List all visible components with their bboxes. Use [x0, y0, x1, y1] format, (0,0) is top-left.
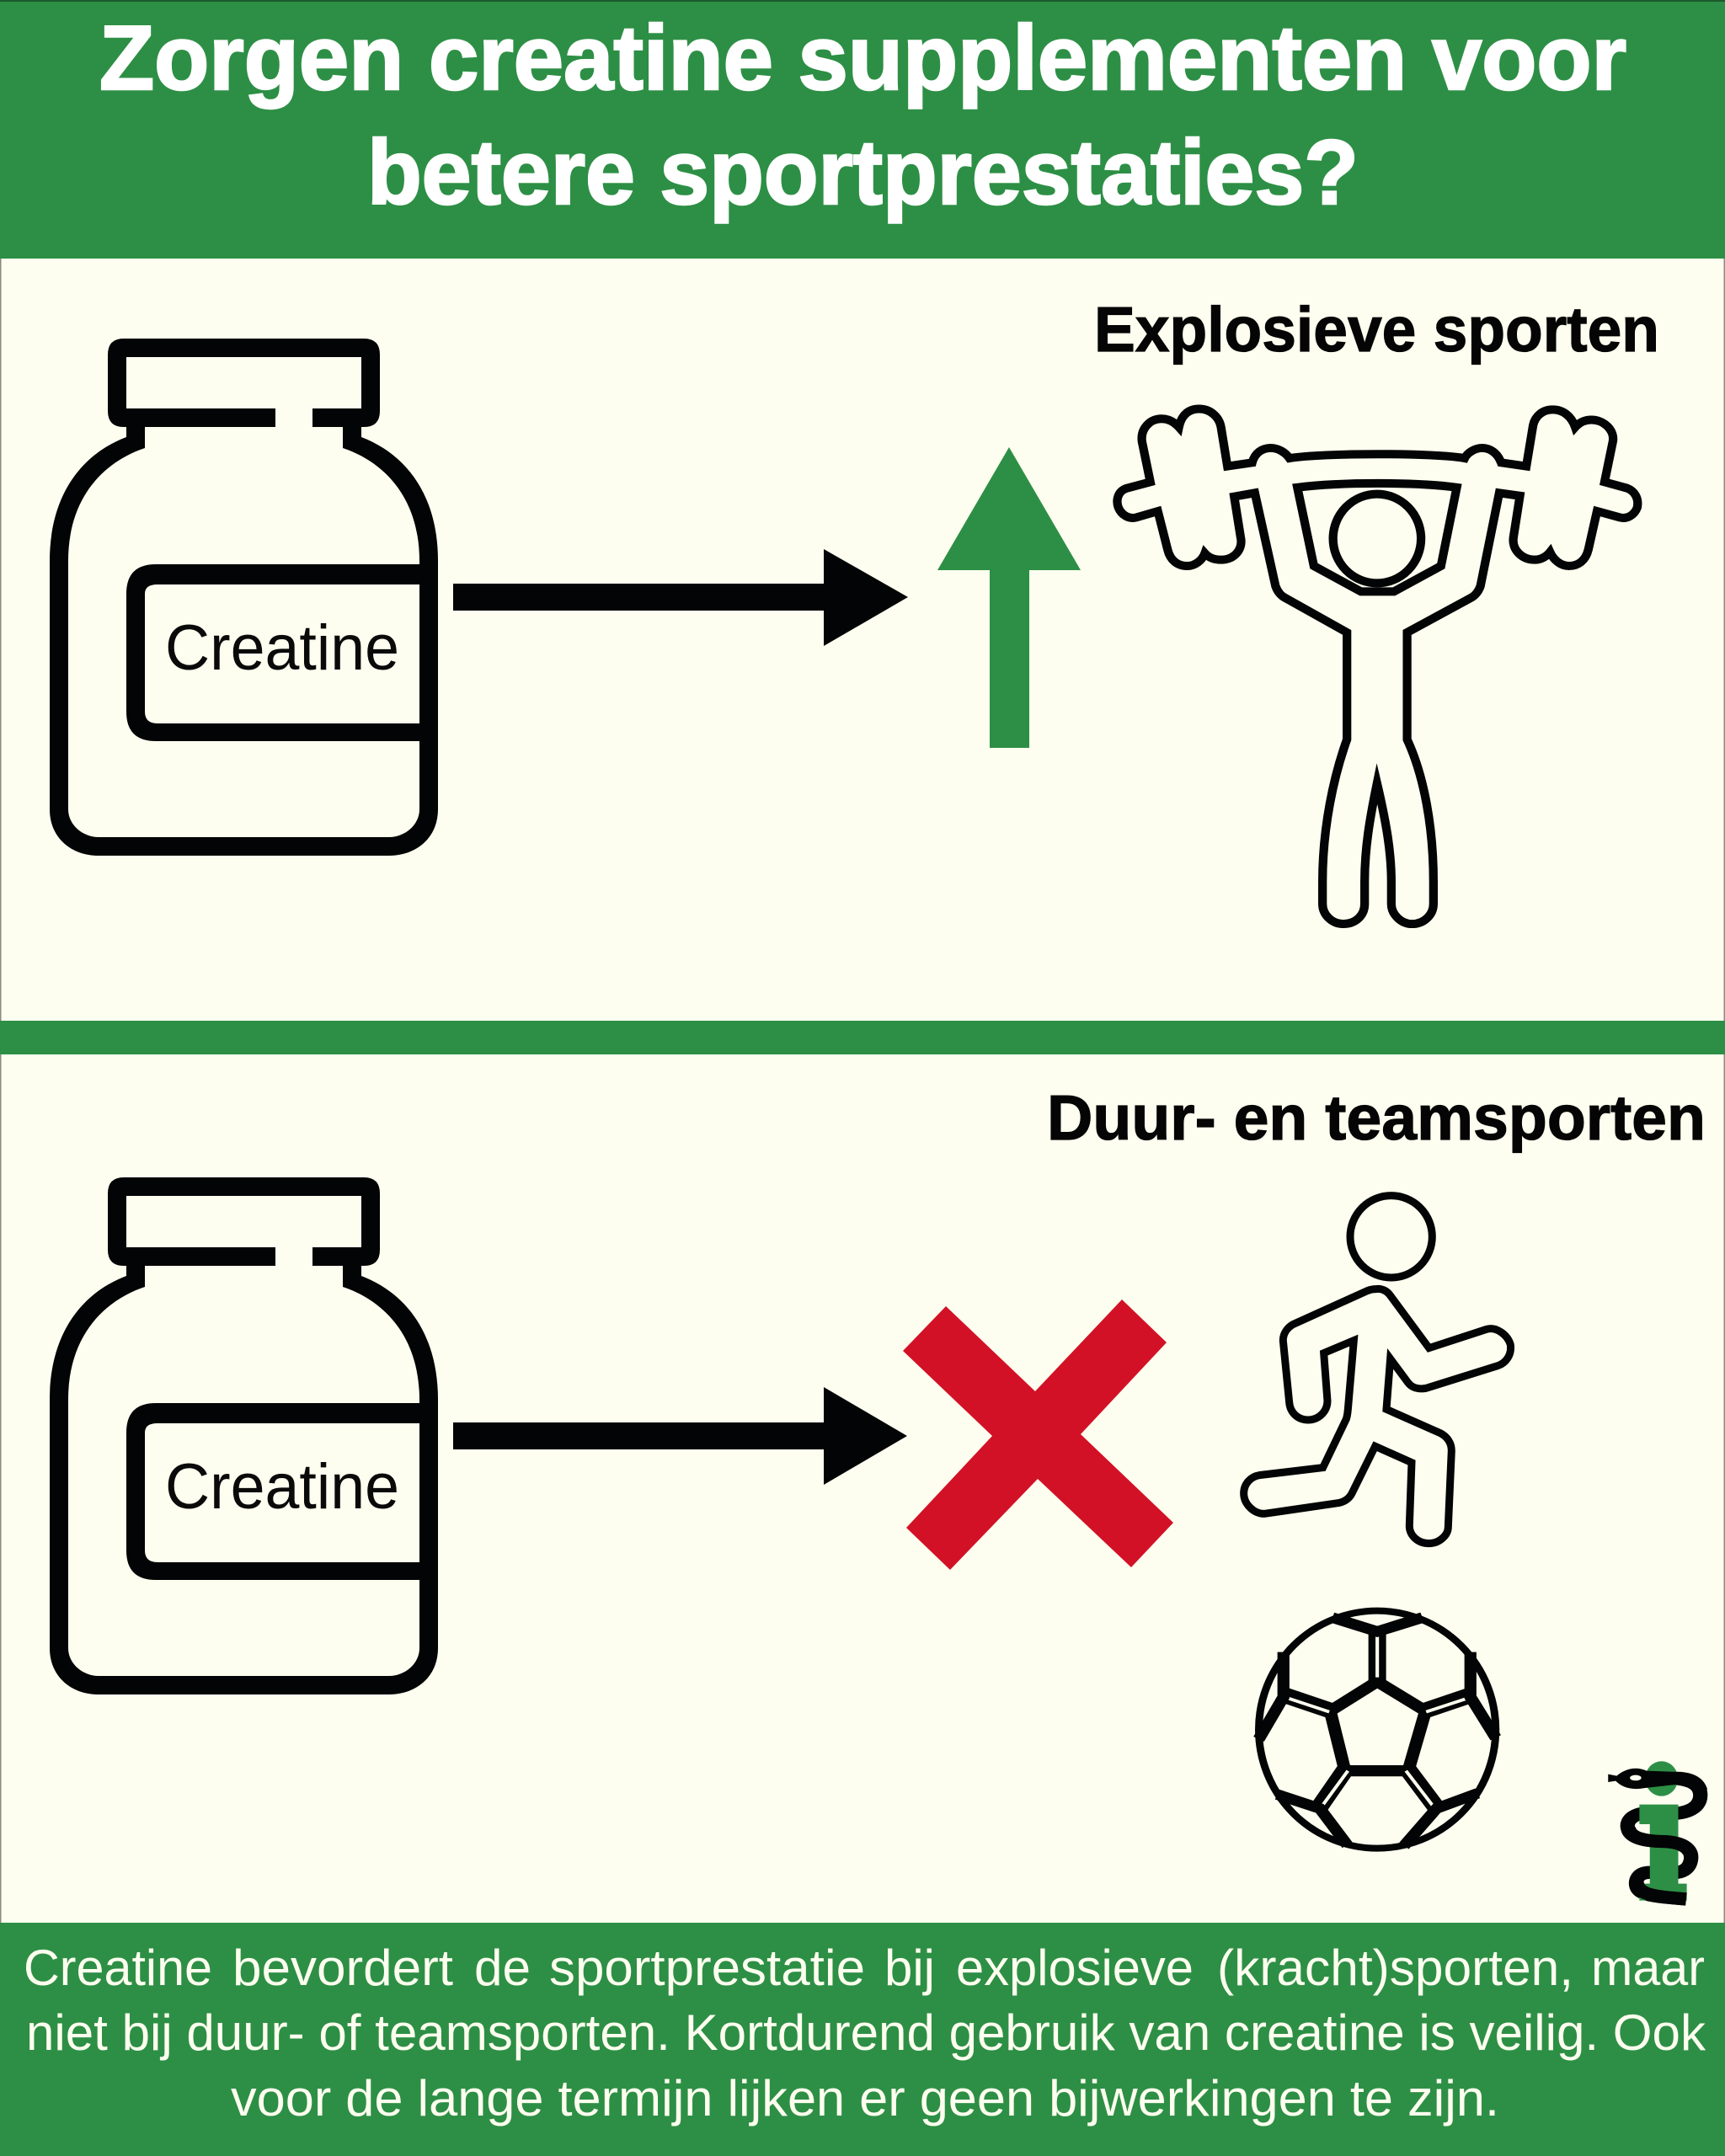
icon: creatine jar: Creatine: [165, 1451, 399, 1523]
summary text: (kracht)sporten,: [1217, 1940, 1573, 1996]
icon: creatine jar: [50, 339, 438, 856]
header banner: [0, 0, 1725, 259]
summary text: voor de lange termijn lijken er geen bijwerkingen te zijn.: [231, 2070, 1499, 2127]
footer summary: [0, 1923, 1725, 2156]
icon: creatine jar: [50, 1177, 438, 1694]
summary text: bevordert: [232, 1940, 453, 1996]
summary text: niet bij duur- of teamsporten. Kortdurend gebruik van creatine is veilig. Ook: [26, 2004, 1706, 2061]
title: betere sportprestaties?: [367, 121, 1359, 224]
summary text: explosieve: [956, 1940, 1194, 1996]
panel: endurance and team sports: [0, 1054, 1725, 1923]
icon: creatine jar: Creatine: [165, 612, 399, 684]
icon: runner: [1244, 1196, 1511, 1544]
summary text: Creatine: [24, 1940, 212, 1996]
arrow: green up: [937, 447, 1081, 748]
heading: explosieve sporten: Explosieve sporten: [1094, 294, 1659, 365]
divider band: [0, 1021, 1725, 1054]
heading: duur- en teamsporten: Duur- en teamsporten: [1047, 1082, 1706, 1153]
icon: weightlifter: [1117, 409, 1637, 924]
summary text: [24, 1940, 1706, 2127]
panel: explosive sports: [0, 259, 1725, 1021]
summary text: sportprestatie: [549, 1940, 865, 1996]
icon: medical information logo: [1608, 1761, 1701, 1901]
summary text: maar: [1591, 1940, 1705, 1996]
icon: red cross: [903, 1299, 1173, 1570]
title: Zorgen creatine supplementen voor: [99, 7, 1626, 109]
arrow: jar to effect: [453, 549, 908, 646]
summary text: bij: [884, 1940, 935, 1996]
icon: soccer ball: [1258, 1611, 1496, 1849]
title: [99, 7, 1626, 224]
arrow: jar to effect: [453, 1387, 907, 1485]
summary text: de: [474, 1940, 531, 1996]
